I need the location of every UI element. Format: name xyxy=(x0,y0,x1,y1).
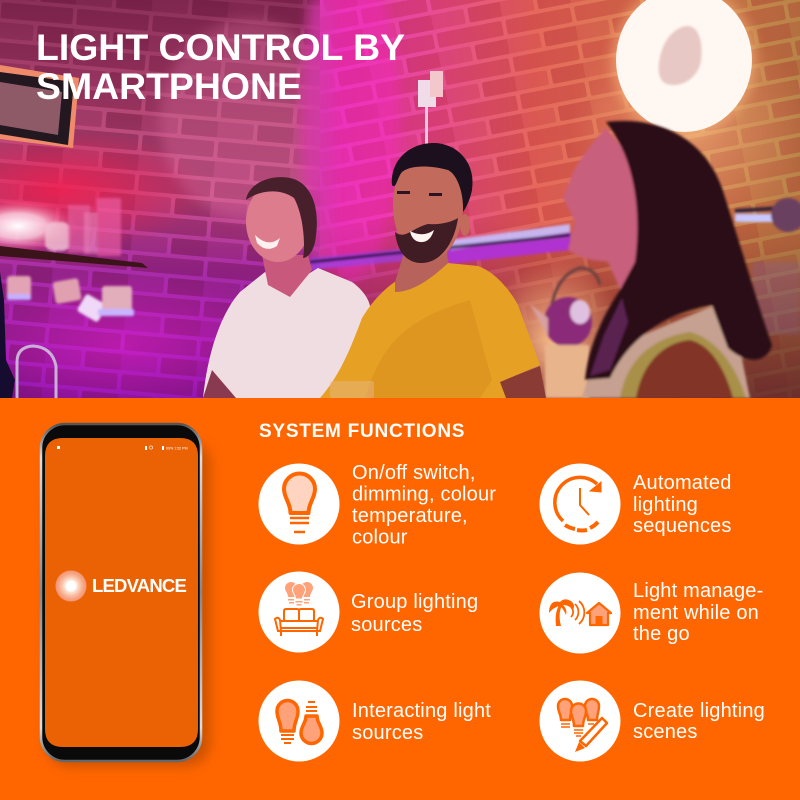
smartphone xyxy=(41,424,210,766)
label: the go xyxy=(633,623,690,645)
person: woman in profile, out of focus xyxy=(563,121,772,398)
label: scenes xyxy=(633,721,698,743)
framed picture xyxy=(0,65,79,148)
glasses and jar on the shelf xyxy=(45,198,121,256)
LEDVANCE logo xyxy=(56,570,186,602)
icon: bulbs over sofa xyxy=(275,582,323,636)
LEDVANCE logo: LEDVANCE xyxy=(92,575,186,596)
arm with yellow hem xyxy=(620,332,746,398)
wall corner softening xyxy=(308,0,332,262)
label: Automated xyxy=(633,472,732,494)
pipe with blue LED strip xyxy=(310,198,800,270)
right brick wall xyxy=(300,0,800,420)
drinking glass xyxy=(330,381,374,398)
title: SMARTPHONE xyxy=(36,65,302,107)
label: Create lighting xyxy=(633,700,765,722)
left brick wall xyxy=(0,0,320,398)
sleeveless top xyxy=(582,305,750,398)
title: LIGHT CONTROL BY xyxy=(36,26,405,68)
phone body xyxy=(41,424,201,761)
label: colour xyxy=(352,526,408,548)
dark figure at the left edge xyxy=(0,272,15,398)
round wall lamp xyxy=(612,0,756,135)
panel: photo of friends in a colourfully lit room xyxy=(0,0,800,420)
label: Light manage- xyxy=(633,580,763,602)
label: Group lighting xyxy=(351,591,478,613)
function: on/off switch xyxy=(258,462,496,548)
label: dimming, colour xyxy=(352,484,496,506)
heading: system functions: SYSTEM FUNCTIONS xyxy=(259,421,465,442)
long dark hair xyxy=(585,121,772,380)
label: lighting xyxy=(633,494,698,516)
label: On/off switch, xyxy=(352,462,476,484)
label: sequences xyxy=(633,515,732,537)
icon: clock with arrow xyxy=(555,477,601,530)
icon: two opposed bulbs xyxy=(277,700,322,744)
status bar: 99% 1:52 PM xyxy=(166,446,188,450)
status bar xyxy=(57,446,188,450)
wire mesh at right xyxy=(752,262,800,334)
kettle xyxy=(530,268,600,398)
person: man in white t-shirt xyxy=(203,177,370,398)
function: interacting light sources xyxy=(258,680,491,762)
wooden shelf xyxy=(0,246,148,268)
function: automated lighting sequences xyxy=(540,464,732,544)
label: Interacting light xyxy=(352,700,491,722)
phone screen xyxy=(45,438,198,747)
label: sources xyxy=(351,614,422,636)
hanging mugs xyxy=(7,276,134,323)
kitchen tap xyxy=(17,346,56,398)
function: group lighting sources xyxy=(258,572,478,652)
neck and face xyxy=(562,128,640,292)
label: sources xyxy=(352,722,423,744)
white plug adapter and cable xyxy=(418,71,443,145)
label: ment while on xyxy=(633,602,759,624)
white light glow on the counter xyxy=(0,202,70,250)
icon: palm tree, signal and house xyxy=(549,599,611,626)
person: man in yellow t-shirt xyxy=(320,143,546,398)
label: temperature, xyxy=(352,505,468,527)
title xyxy=(36,26,405,107)
icon: three bulbs and pencil xyxy=(558,699,607,752)
function: light management while on the go xyxy=(540,572,763,654)
function: create lighting scenes xyxy=(540,680,765,762)
phone drop shadow xyxy=(46,440,210,766)
icon: light bulb xyxy=(284,473,315,532)
